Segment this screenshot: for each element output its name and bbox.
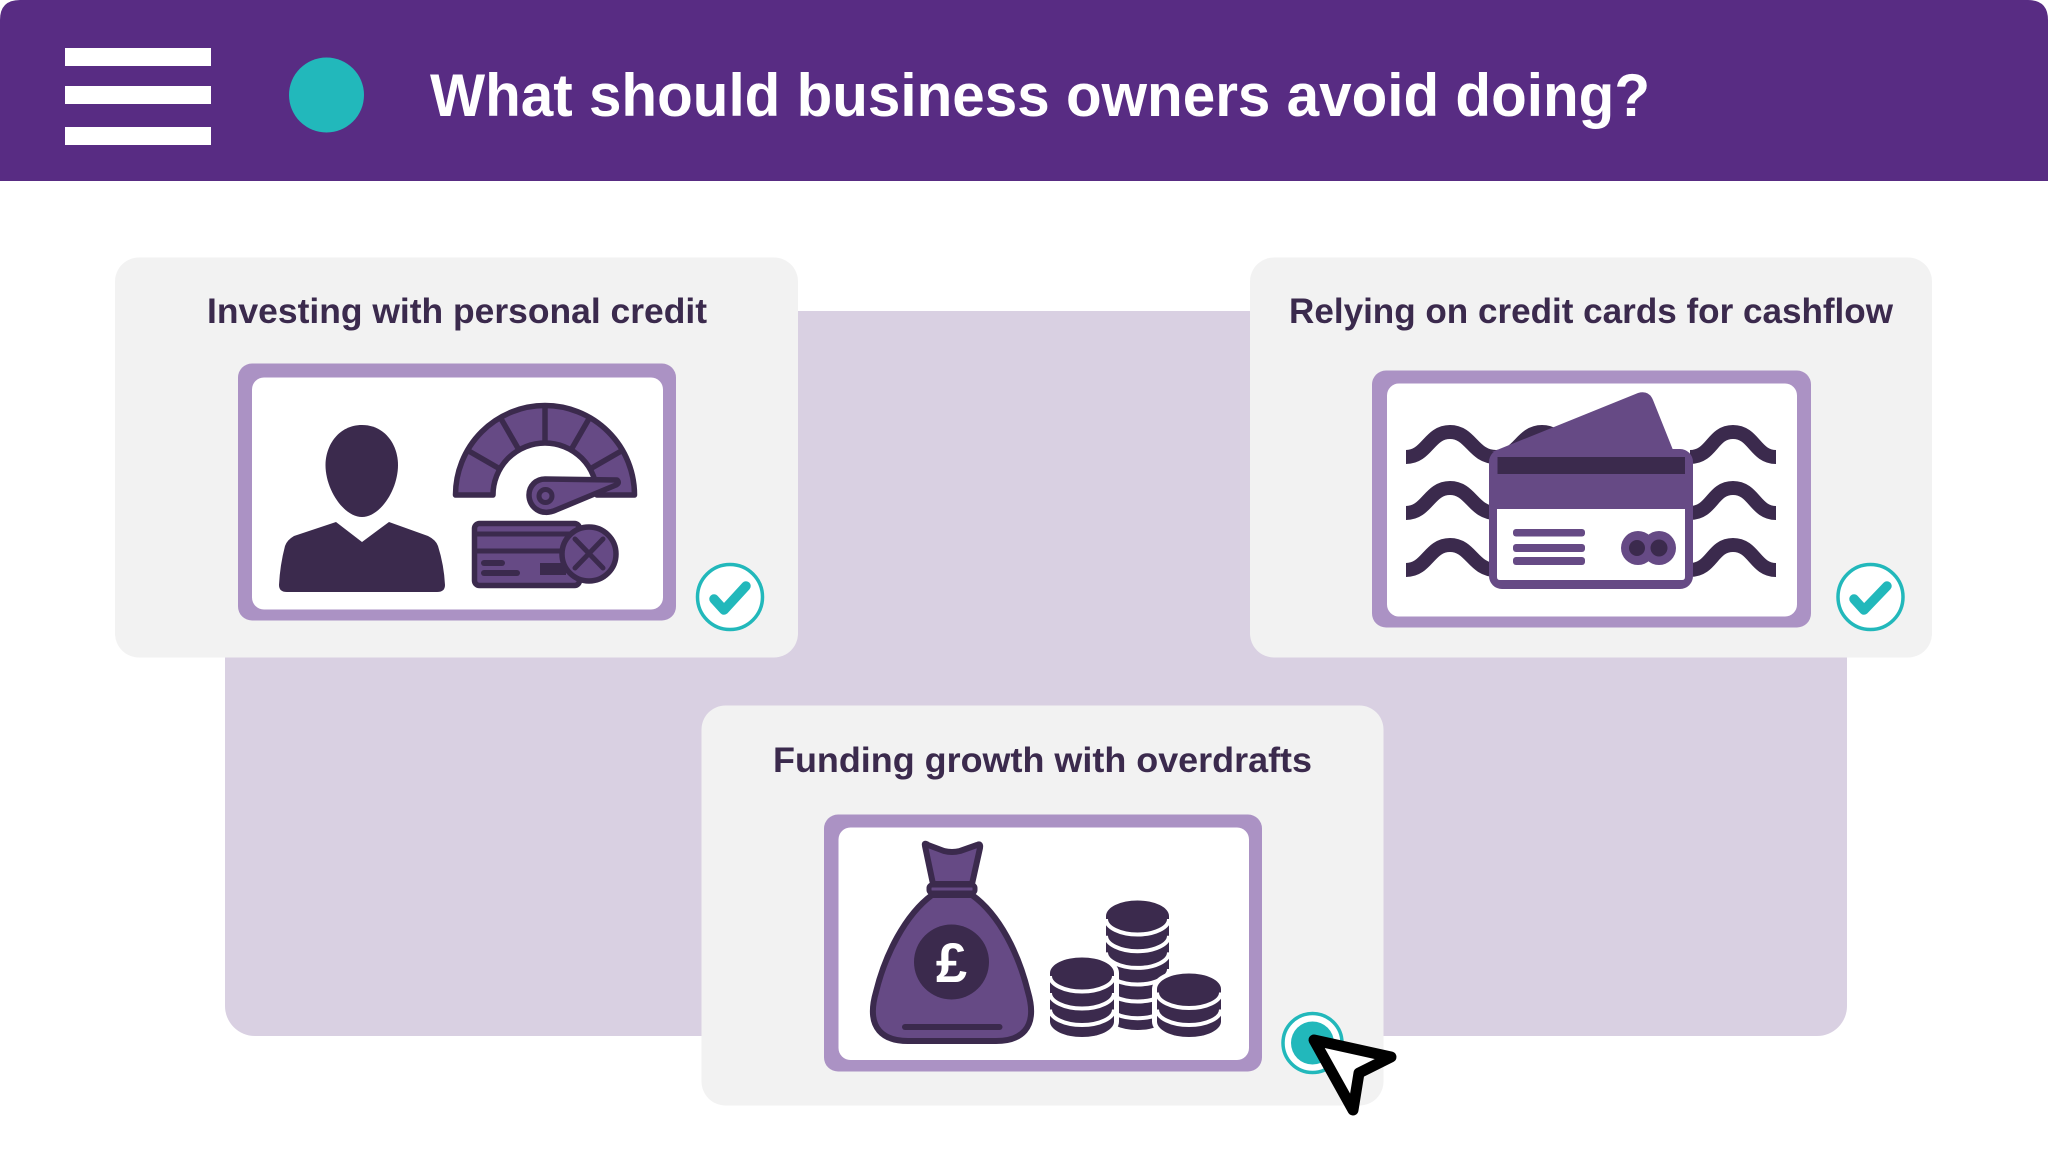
panel: investing with personal credit [115,258,798,658]
icon: declined card [474,524,616,586]
icon: money bag [873,844,1031,1041]
progress dot [289,58,364,132]
icon: money bag: £ [936,931,967,994]
icon: check [698,564,762,630]
icon: credit score gauge [456,405,634,512]
icon: check [1838,564,1903,630]
heading: Investing with personal credit [207,292,707,331]
icon: coin stacks [1045,900,1226,1042]
panel: funding growth with overdrafts [702,706,1391,1110]
title: What should business owners avoid doing? [430,62,1650,129]
image frame [1372,370,1811,628]
icon: credit cards [1489,392,1693,589]
heading: Funding growth with overdrafts [773,741,1312,780]
icon: waves [1406,432,1776,570]
image frame [238,364,676,620]
icon: mouse cursor [1314,1040,1391,1110]
background panel [225,311,1847,1036]
heading: Relying on credit cards for cashflow [1289,292,1894,331]
selected radio button [1283,1014,1342,1072]
image frame [824,814,1262,1072]
icon: person [279,425,445,592]
header bar [0,0,2048,181]
panel: relying on credit cards [1250,258,1932,658]
icon: menu [65,48,211,145]
